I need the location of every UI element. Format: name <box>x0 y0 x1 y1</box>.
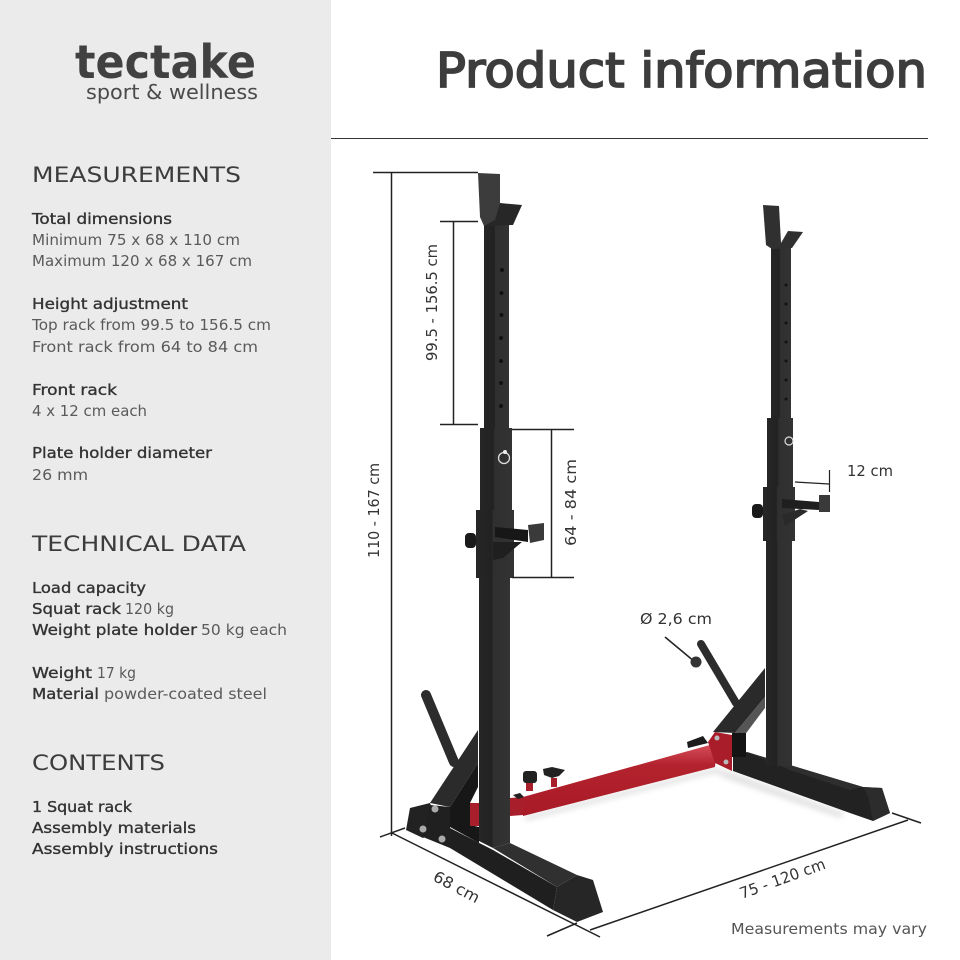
dimension: 12 cm arm: 12 cm <box>847 462 893 480</box>
section: measurements: MEASUREMENTS <box>32 163 241 187</box>
dimension: total height: 110 - 167 cm <box>365 463 383 558</box>
dimension: top rack <box>423 221 478 424</box>
section: measurements: Maximum 120 x 68 x 167 cm <box>32 252 252 270</box>
section: technical data: 17 kg <box>97 664 136 682</box>
section: technical data: Weight plate holder <box>32 621 198 639</box>
section: measurements: Height adjustment <box>32 295 188 313</box>
dimension: front rack <box>512 429 580 578</box>
dimension: width: 75 - 120 cm <box>737 855 828 903</box>
section: contents: Assembly materials <box>32 819 196 837</box>
section: technical data: powder-coated steel <box>104 685 267 703</box>
section: measurements: Total dimensions <box>31 210 172 228</box>
section: measurements: 4 x 12 cm each <box>32 402 147 420</box>
section: technical data: 120 kg <box>125 600 174 618</box>
section: technical data: Material <box>32 685 99 703</box>
section: measurements: Front rack from 64 to 84 cm <box>32 338 258 356</box>
title: Product information <box>436 43 927 99</box>
section: contents: Assembly instructions <box>32 840 218 858</box>
section: measurements: 26 mm <box>32 466 88 484</box>
knobs <box>523 767 565 791</box>
section: technical data: TECHNICAL DATA <box>31 532 247 556</box>
section: technical data: Load capacity <box>32 579 146 597</box>
panel: left sidebar <box>0 0 331 960</box>
section: measurements: Front rack <box>32 381 117 399</box>
red crossbar <box>510 732 732 816</box>
right stand <box>687 205 890 821</box>
logo: sport & wellness <box>86 80 258 104</box>
dimension: 12 cm arm <box>795 462 893 492</box>
logo: tectake <box>75 35 256 89</box>
left stand <box>406 173 603 922</box>
dimension: plate holder diameter <box>640 610 712 668</box>
dimension: top rack: 99.5 - 156.5 cm <box>423 244 441 361</box>
section: measurements: Minimum 75 x 68 x 110 cm <box>32 231 240 249</box>
dimension: front rack: 64 - 84 cm <box>562 459 580 546</box>
section: technical data: 50 kg each <box>201 621 287 639</box>
section: contents <box>32 751 218 858</box>
section: technical data: Weight <box>32 664 92 682</box>
dimension: depth <box>380 828 600 937</box>
section: technical data: Squat rack <box>32 600 121 618</box>
section: measurements: Top rack from 99.5 to 156.5 cm <box>31 316 271 334</box>
section: contents: 1 Squat rack <box>32 798 132 816</box>
dimension: plate holder diameter: Ø 2,6 cm <box>640 610 712 628</box>
dimension: width <box>590 813 921 930</box>
dimension: depth: 68 cm <box>430 868 483 907</box>
footnote: Measurements may vary <box>731 920 927 938</box>
dimension: total height <box>365 172 478 836</box>
product: squat rack illustration <box>406 173 890 922</box>
section: measurements: Plate holder diameter <box>32 444 213 462</box>
section: contents: CONTENTS <box>32 751 165 775</box>
section: technical data <box>31 532 287 703</box>
section: measurements <box>31 163 271 484</box>
